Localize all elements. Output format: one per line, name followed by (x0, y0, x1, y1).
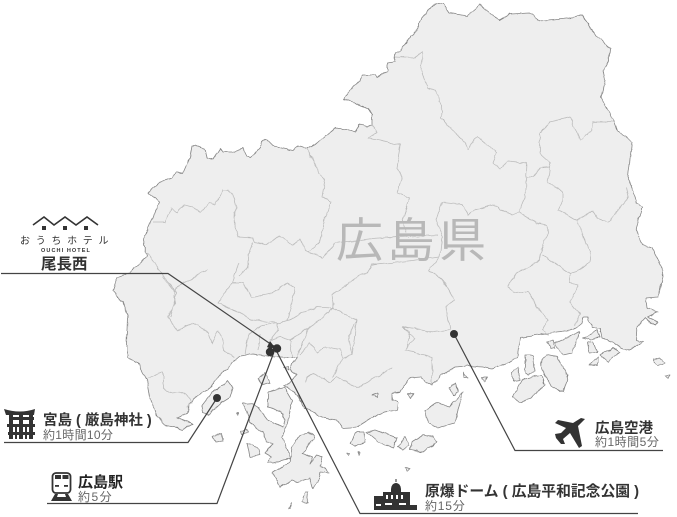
leader line: Hiroshima Station (47, 352, 274, 504)
leader line: Ouchi Hotel (1, 274, 272, 345)
marker: Hiroshima Airport (450, 330, 458, 338)
travel time: 約15分 (425, 498, 466, 513)
icon: Atomic Bomb Dome (374, 479, 417, 510)
icon: train (51, 473, 72, 501)
logo: Ouchi Hotel (20, 217, 114, 273)
label: Atomic Bomb Dome (425, 482, 639, 513)
label: Hiroshima Airport (595, 419, 659, 449)
name: 広島空港 (595, 419, 653, 437)
heading: prefecture name: 広島県 (336, 214, 490, 267)
icon: three house roofs (33, 217, 98, 230)
leader line: Miyajima (4, 398, 217, 442)
name: 宮島 ( 厳島神社 ) (43, 411, 152, 429)
leader line: Hiroshima Airport (454, 334, 663, 450)
label: Hiroshima Station (78, 473, 123, 504)
marker: Miyajima (213, 394, 221, 402)
travel time: 約1時間5分 (595, 434, 659, 449)
icon: torii gate (4, 409, 35, 439)
icon: airplane (555, 418, 585, 448)
logo wordmark: Latin: OUCHI HOTEL (41, 248, 91, 254)
markers: central Hiroshima (266, 341, 281, 356)
map: municipal borders (147, 51, 629, 408)
leader line: Atomic Bomb Dome (277, 352, 638, 514)
name: 原爆ドーム ( 広島平和記念公園 ) (425, 482, 639, 500)
travel time: 約5分 (78, 489, 113, 504)
location name: Onaganishi: 尾長西 (41, 255, 88, 273)
map: islands of the Seto Inland Sea (202, 330, 670, 508)
label: Miyajima (43, 411, 152, 442)
logo wordmark: Japanese: おうちホテル (20, 235, 114, 247)
travel time: 約1時間10分 (43, 427, 113, 442)
map: Hiroshima prefecture mainland (113, 3, 663, 430)
name: 広島駅 (78, 473, 123, 491)
